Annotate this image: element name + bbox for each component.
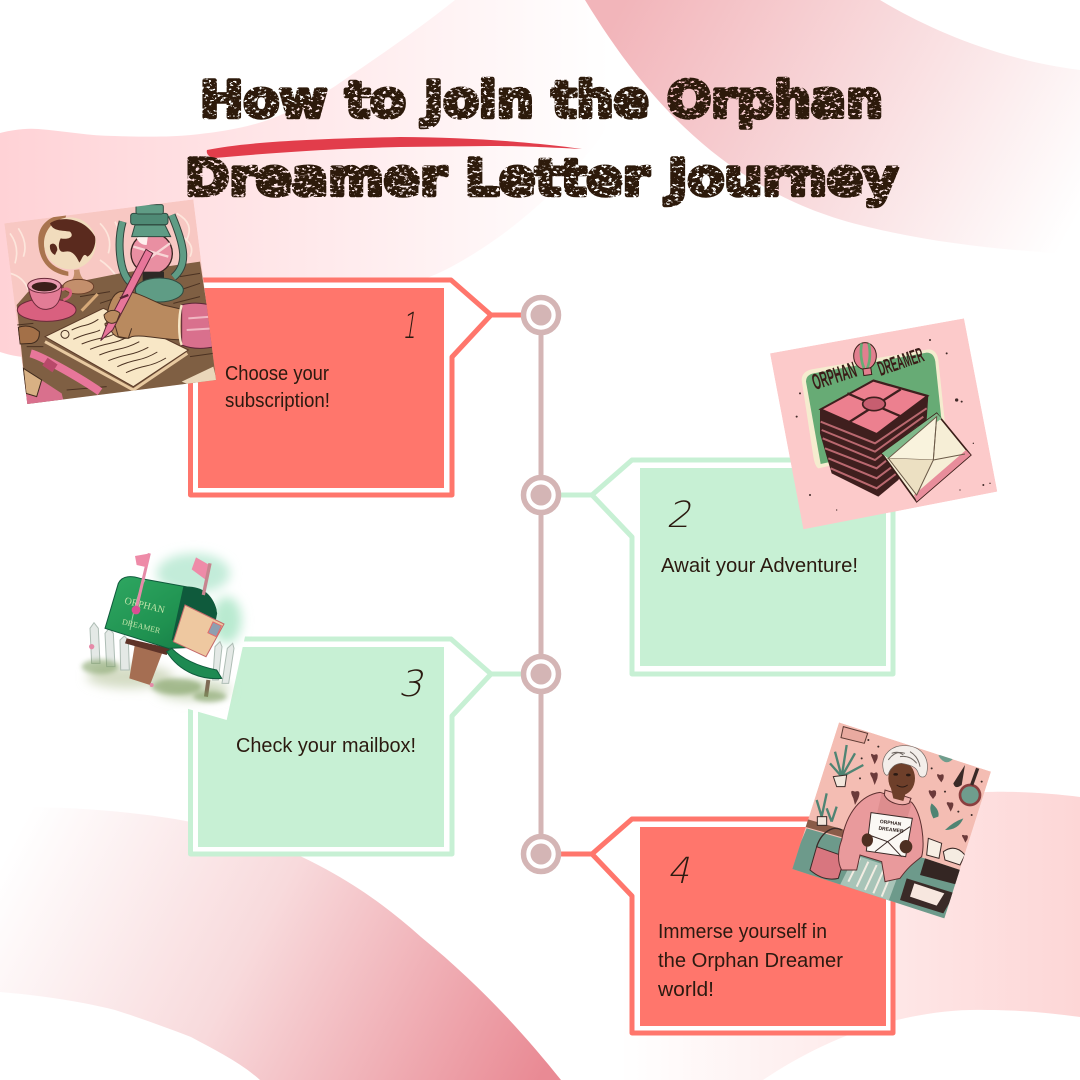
step 3 card: 3 bbox=[398, 664, 424, 705]
timeline node 3 bbox=[524, 656, 558, 692]
illustration: watercolour green mailbox bbox=[77, 532, 260, 720]
step 2 card: 2 bbox=[666, 495, 691, 536]
title: Dreamer Letter Journey bbox=[185, 149, 898, 207]
illustration: stack of Orphan Dreamer letters: ORPHAN bbox=[809, 357, 860, 395]
background: bottom-right blush wave bbox=[570, 792, 1080, 1080]
step 4 card: world! bbox=[657, 979, 714, 1001]
timeline node 1 bbox=[524, 298, 558, 332]
timeline spine bbox=[538, 315, 544, 854]
illustration: grandmother holding an Orphan Dreamer letter in a kitchen: DREAMER bbox=[878, 826, 904, 835]
title: How to Join the Orphan bbox=[200, 71, 883, 129]
title bbox=[185, 71, 898, 207]
timeline node 2 bbox=[524, 478, 558, 512]
timeline node 4 bbox=[524, 836, 558, 872]
step 3 card bbox=[190, 639, 522, 854]
step 1 card bbox=[190, 280, 522, 495]
step 2 card: Await your Adventure! bbox=[661, 555, 858, 577]
illustration: stack of Orphan Dreamer letters: DREAMER bbox=[875, 344, 927, 381]
background: top-right pink wave bbox=[585, 0, 1080, 255]
step 3 card: Check your mailbox! bbox=[236, 735, 416, 757]
background: top-left blush wave bbox=[0, 0, 700, 358]
illustration: grandmother holding an Orphan Dreamer letter in a kitchen bbox=[788, 722, 991, 922]
background: bottom-left rose wave bbox=[0, 807, 561, 1080]
title underline brush stroke bbox=[207, 137, 582, 158]
step 4 card: 4 bbox=[667, 851, 689, 892]
illustration: watercolour green mailbox: ORPHAN bbox=[123, 596, 166, 616]
step 4 card bbox=[560, 819, 893, 1033]
step 4 card: Immerse yourself in bbox=[658, 921, 827, 943]
illustration: writing desk with globe, lantern and pen bbox=[4, 199, 220, 407]
step 4 card: the Orphan Dreamer bbox=[658, 950, 843, 972]
step 2 card bbox=[560, 460, 893, 674]
illustration: grandmother holding an Orphan Dreamer letter in a kitchen: ORPHAN bbox=[879, 819, 902, 828]
illustration: watercolour green mailbox: DREAMER bbox=[121, 617, 162, 636]
illustration: stack of Orphan Dreamer letters bbox=[770, 318, 997, 529]
step 1 card: Choose your bbox=[225, 363, 329, 385]
step 1 card: subscription! bbox=[225, 390, 330, 412]
step 1 card: 1 bbox=[402, 306, 416, 347]
